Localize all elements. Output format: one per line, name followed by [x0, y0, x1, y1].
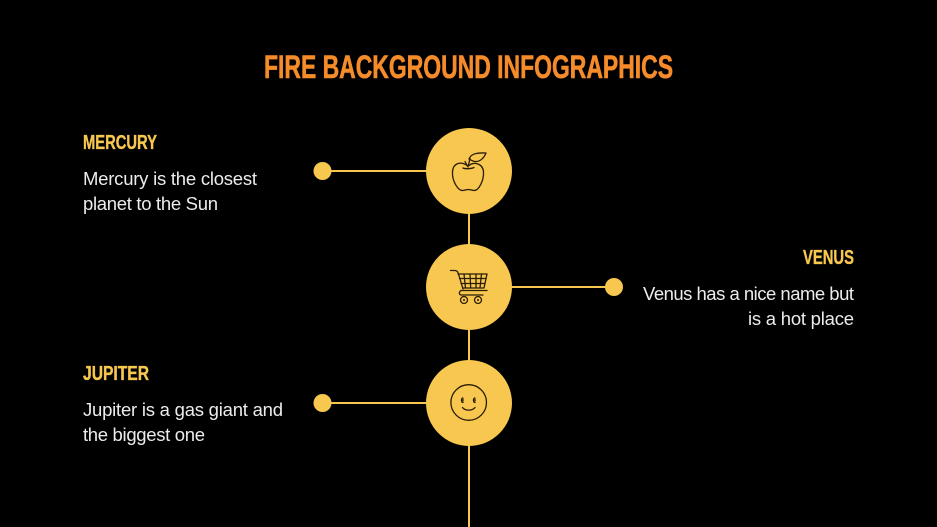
body: jupiter: the biggest one [83, 424, 205, 445]
connector: venus [508, 278, 623, 296]
text block: mercury [83, 131, 257, 214]
heading: jupiter: JUPITER [83, 362, 149, 385]
heading: mercury: MERCURY [83, 131, 157, 154]
central timeline line [468, 200, 470, 527]
text block: venus [643, 246, 854, 329]
body: venus [643, 283, 854, 329]
body: jupiter: Jupiter is a gas giant and [83, 399, 283, 420]
body: mercury: planet to the Sun [83, 193, 218, 214]
body: mercury: Mercury is the closest [83, 168, 257, 189]
connector: mercury [314, 162, 430, 180]
body: venus: Venus has a nice name but [643, 283, 854, 304]
node: venus shopping cart icon [426, 244, 512, 330]
text block: jupiter [83, 362, 283, 445]
node: mercury apple icon [426, 128, 512, 214]
body: jupiter [83, 399, 283, 445]
body: venus: is a hot place [748, 308, 854, 329]
heading: venus: VENUS [803, 246, 854, 269]
body: mercury [83, 168, 257, 214]
connector: jupiter [314, 394, 430, 412]
title: FIRE BACKGROUND INFOGRAPHICS [264, 49, 673, 85]
node: jupiter smiley icon [426, 360, 512, 446]
